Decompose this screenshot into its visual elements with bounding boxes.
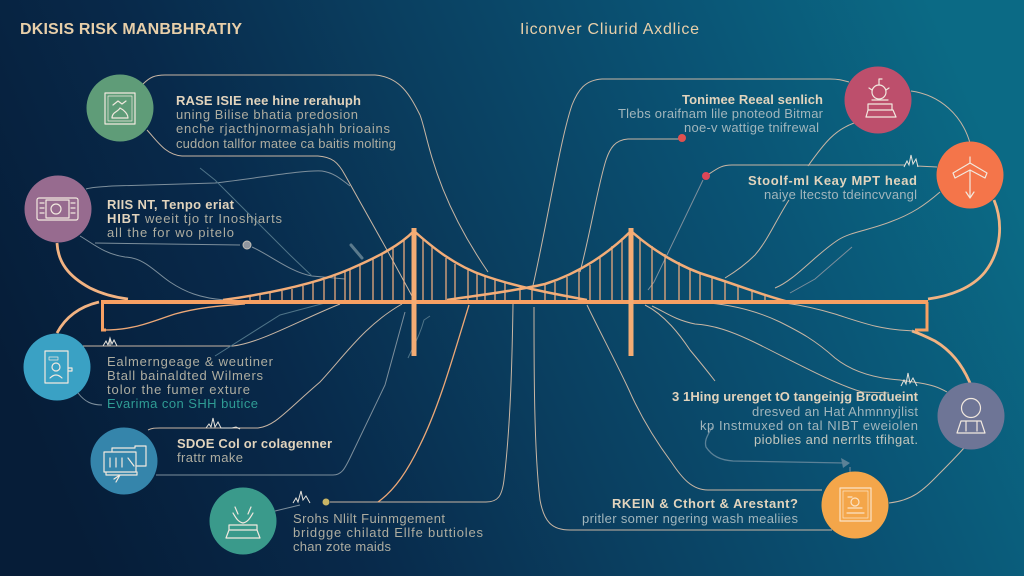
connector: purple top — [86, 171, 350, 189]
connector: rose lower continuation — [725, 200, 789, 278]
marker: faint node — [351, 245, 362, 258]
connector: amber right — [889, 448, 964, 503]
heading: RKEIN & Cthort & Arestant? — [612, 496, 798, 511]
body text: Srohs Nlilt Fuinmgement — [293, 511, 445, 526]
connector: rose right — [911, 91, 970, 143]
icon: stacked base with gear — [866, 79, 896, 117]
connector: blue lower — [78, 393, 102, 405]
icon: framed chart — [840, 488, 871, 521]
connectors: all leader lines — [57, 75, 1000, 530]
body text — [176, 107, 396, 151]
body text: Tlebs oraifnam lile pnoteod Bitmar — [618, 106, 824, 121]
marker: spark slate — [901, 373, 917, 386]
connector: hook arrow — [705, 427, 850, 472]
marker: spark blue2 — [206, 418, 240, 429]
body text — [700, 404, 918, 447]
connector: blue gray branch — [215, 303, 325, 356]
body text: noe-v wattige tnifrewal — [684, 120, 819, 135]
connector: teal short — [275, 505, 300, 511]
panel: purple node — [24, 176, 282, 242]
body text: HIBT weeit tjo tr Inoshjarts — [107, 211, 282, 226]
connector: orange lower — [775, 192, 940, 288]
panel: deep blue node — [90, 428, 332, 494]
circle — [936, 142, 1004, 208]
bridge — [101, 228, 928, 356]
connector: red dot one — [580, 139, 680, 272]
connector: rose top — [532, 79, 849, 290]
marker: spark blue — [103, 338, 117, 346]
icon: framed picture — [105, 93, 135, 124]
connector: rose lower — [808, 123, 854, 166]
title: right: Iiconver Cliurid Axdlice — [520, 21, 699, 38]
body text: tolor the fumer exture — [107, 382, 250, 397]
marker: red dot two — [702, 172, 710, 180]
connector: orange thick to deck — [928, 200, 1000, 299]
connector: blue2 bottom — [156, 312, 405, 475]
connector: blue2 faint branch — [408, 316, 430, 358]
heading: Tonimee Reeal senlich — [682, 92, 823, 107]
circle — [844, 66, 912, 134]
circle — [86, 74, 154, 142]
body text: Evarima con SHH butice — [107, 396, 258, 411]
icon: stand — [226, 507, 260, 538]
connector: purple lower — [80, 236, 225, 300]
panel: rose node — [618, 66, 912, 135]
connector: amber bottom — [534, 307, 832, 530]
connector: third to text — [645, 305, 715, 381]
connector: purple dot to bridge — [252, 247, 345, 279]
panel: green node — [86, 74, 396, 151]
connector: blue to deck — [83, 304, 340, 346]
body text: enche rjacthjnormasjahh brioains — [176, 121, 390, 136]
connector: green bottom — [147, 130, 412, 296]
circle — [938, 382, 1004, 450]
body text — [107, 211, 282, 240]
panel: slate node — [672, 382, 1004, 450]
icon: arrow roof — [953, 157, 987, 198]
heading: Stoolf-ml Keay MPT head — [748, 173, 917, 188]
marker: spark teal — [293, 491, 310, 503]
heading: RIIS NT, Tenpo eriat — [107, 197, 235, 212]
connector: red dot two — [709, 165, 937, 174]
connector: slate thick to deck — [912, 331, 970, 383]
heading: 3 1Hing urenget tO tangeinjg Brodueint — [672, 389, 919, 404]
panel: blue node — [24, 334, 274, 411]
circle — [24, 176, 92, 242]
deck — [101, 300, 928, 304]
body text — [618, 106, 824, 135]
marker: teal dot — [322, 498, 330, 506]
connector: teal dot to bridge — [330, 304, 513, 502]
connector: faint right — [790, 247, 852, 293]
heading: SDOE Col or colagenner — [177, 436, 332, 451]
connector: purple middle to dot — [95, 243, 240, 245]
body text: all the for wo pitelo — [107, 225, 234, 240]
connector: diagonal — [200, 168, 312, 276]
body text: frattr make — [177, 450, 243, 465]
body text: kp Instmuxed on tal NIBT eweiolen — [700, 418, 918, 433]
tower: right — [628, 228, 634, 356]
main cable: right tower — [447, 231, 789, 302]
circle — [822, 472, 888, 538]
connector: purple thick to deck — [57, 243, 128, 299]
main cable: left tower — [223, 231, 587, 300]
panel: orange node — [748, 142, 1004, 208]
body text: naiye ltecsto tdeincvvangl — [764, 187, 917, 202]
body text: cuddon tallfor matee ca baitis molting — [176, 136, 396, 151]
tower: left — [412, 228, 416, 356]
marker: purple line dot — [243, 241, 251, 249]
body text: Btall bainaldted Wilmers — [107, 368, 264, 383]
hangers — [250, 238, 765, 301]
panel: amber node — [582, 472, 888, 538]
icon: person — [957, 398, 985, 433]
body text: bridgge chilatd Ellfe buttioles — [293, 525, 484, 540]
body text: pioblies and nerrlts tfihgat. — [754, 432, 918, 447]
circle — [90, 428, 158, 494]
connector: deck right thin — [785, 303, 914, 331]
deck box — [102, 302, 927, 330]
body text: Ealmerngeage & weutiner — [107, 354, 274, 369]
circle — [24, 334, 90, 400]
connector: deck lower curve — [103, 304, 245, 330]
connector: blue thick to deck — [57, 302, 99, 333]
panel: teal node — [210, 488, 484, 554]
icon: dashboard screens — [104, 446, 146, 482]
circle — [210, 488, 276, 554]
connector: slate second — [652, 306, 889, 393]
body text: uning Bilise bhatia predosion — [176, 107, 358, 122]
icon: device — [37, 198, 78, 220]
body text — [293, 511, 484, 554]
body text: pritler somer ngering wash mealiies — [582, 511, 798, 526]
connector: slate middle — [709, 303, 947, 392]
heading: RASE ISIE nee hine rerahuph — [176, 93, 361, 108]
connector: blue2 top — [148, 304, 402, 430]
body text: dresved an Hat Ahmnnyjlist — [752, 404, 918, 419]
connector: green top — [143, 75, 488, 272]
title: left: DKISIS RISK MANBBHRATIY — [20, 21, 242, 38]
marker: red dot one — [678, 134, 686, 142]
body text — [107, 354, 274, 411]
body text: chan zote maids — [293, 539, 392, 554]
marker: spark orange — [904, 155, 918, 167]
icon: framed gauge — [45, 351, 72, 383]
connector: amber top — [587, 305, 822, 490]
connector: red dot two down — [648, 180, 703, 290]
connector: teal branch — [378, 305, 469, 502]
